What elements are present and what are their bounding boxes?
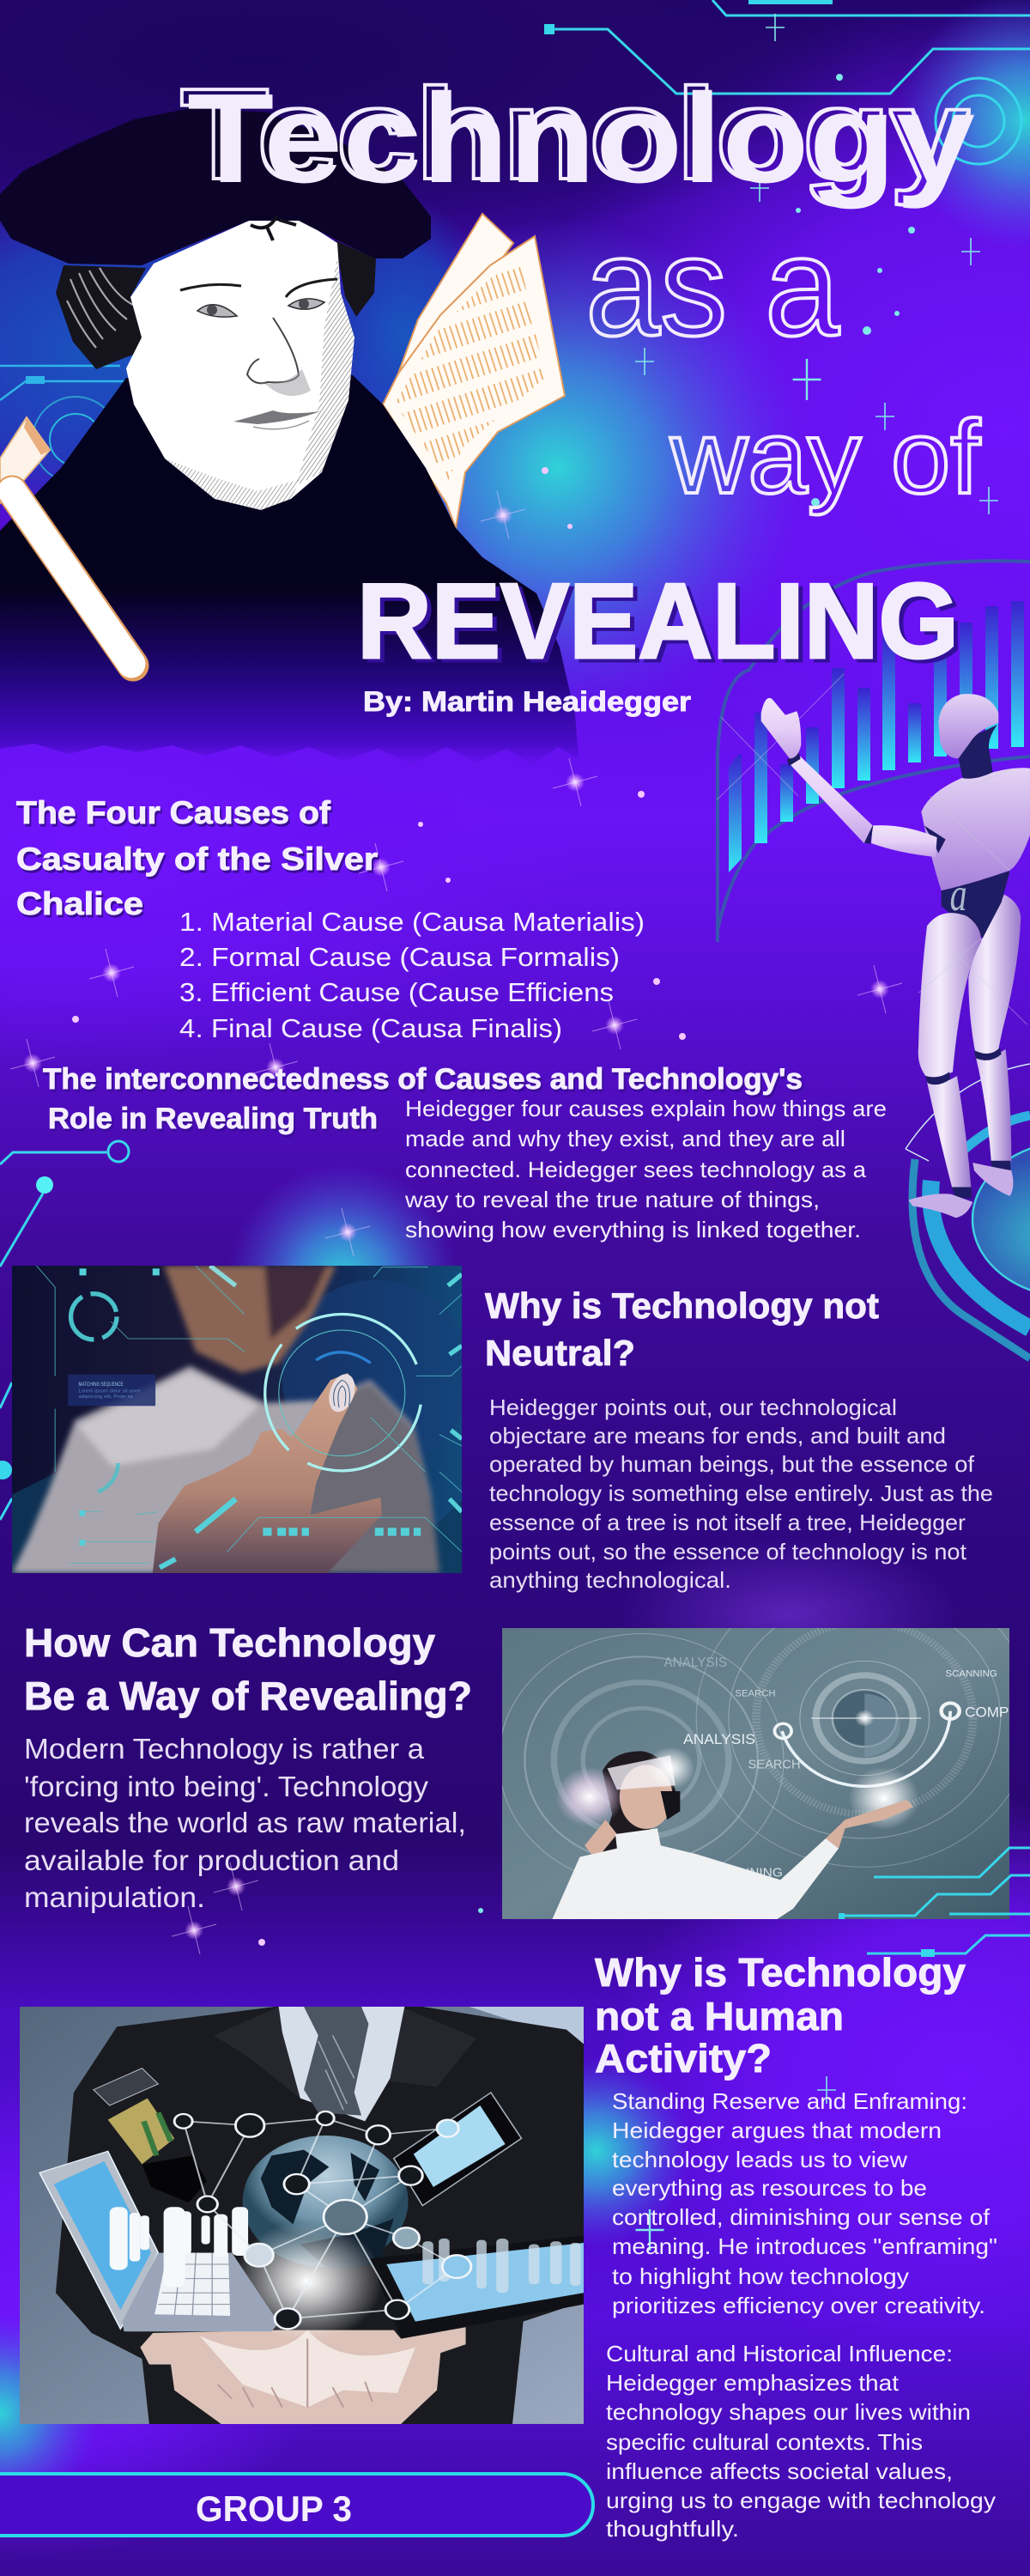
silhouettes on tablet xyxy=(422,2239,581,2293)
glowing arc xyxy=(782,1711,950,1786)
paragraph: standing reserve: technology leads us to view xyxy=(612,2147,907,2172)
heading: not neutral xyxy=(485,1285,879,1373)
watermark letter: a xyxy=(950,869,967,921)
circuit lines upper bottom right xyxy=(867,1935,1030,1957)
paragraph: not neutral: operated by human beings, but the essence of xyxy=(489,1451,975,1477)
tablet xyxy=(371,2236,584,2339)
eyes and brows xyxy=(180,279,337,297)
four causes list: 1. Material Cause (Causa Materialis) xyxy=(179,907,645,937)
hair left xyxy=(56,265,146,369)
portrait: hammer xyxy=(0,417,133,665)
interface labels: SEARCH xyxy=(735,1687,776,1698)
interface labels: NNING xyxy=(740,1866,783,1880)
paragraph: standing reserve: Standing Reserve and Enframing: xyxy=(612,2088,967,2114)
far leg xyxy=(968,895,1021,1056)
photo: hands holding technology xyxy=(20,2007,584,2424)
globe xyxy=(243,2136,409,2267)
gadget box xyxy=(94,2069,158,2105)
paragraph: not neutral xyxy=(489,1394,993,1593)
paragraph: interconnectedness: Heidegger four causes explain how things are xyxy=(405,1096,887,1121)
upper arm xyxy=(871,825,937,857)
silhouettes on laptop xyxy=(110,2207,248,2287)
paragraph: not neutral: Heidegger points out, our technological xyxy=(489,1394,897,1420)
heading: interconnectedness: The interconnectedness of Causes and Technology's xyxy=(43,1063,803,1096)
heading: four causes: Chalice xyxy=(16,886,143,921)
paragraph: interconnectedness: made and why they exist, and they are all xyxy=(405,1126,845,1151)
shoulder joint xyxy=(924,825,946,854)
watermark lines xyxy=(717,674,1027,1024)
heading: four causes: The Four Causes of xyxy=(16,795,331,830)
robot figure xyxy=(717,674,1030,1218)
face xyxy=(126,218,354,510)
heading: human activity: Why is Technology xyxy=(595,1950,966,1995)
heading: human activity: not a Human xyxy=(595,1994,844,2038)
waist xyxy=(942,871,1010,938)
paragraph: cultural influence xyxy=(606,2341,996,2542)
paragraph: standing reserve: Heidegger argues that modern xyxy=(612,2117,942,2143)
circuit lines over woman photo xyxy=(839,1848,1030,1919)
paragraph: standing reserve xyxy=(612,2088,997,2318)
heading: not neutral: Why is Technology not xyxy=(485,1285,879,1326)
heading: interconnectedness xyxy=(43,1063,803,1135)
paragraph: way of revealing: 'forcing into being'. Technology xyxy=(24,1771,429,1802)
shirt xyxy=(279,2007,404,2121)
paragraph: standing reserve: meaning. He introduces "enframing" xyxy=(612,2233,997,2259)
hair right xyxy=(335,240,376,317)
circuit lines mid left xyxy=(0,1141,129,1520)
laptop xyxy=(39,2151,158,2329)
robot platform rings xyxy=(906,1064,1030,1358)
interface label: MATCHING SEQUENCE xyxy=(79,1382,124,1388)
paragraph: cultural influence: technology shapes our lives within xyxy=(606,2399,971,2425)
portrait: papers xyxy=(383,214,565,528)
heading: four causes: Casualty of the Silver xyxy=(16,841,378,877)
paragraph: way of revealing xyxy=(24,1733,466,1913)
portrait: Heidegger illustration xyxy=(0,108,579,764)
paragraph: way of revealing: reveals the world as raw material, xyxy=(24,1807,466,1838)
paragraph: way of revealing: available for production and xyxy=(24,1844,399,1876)
network lines xyxy=(184,2118,457,2318)
paragraph: not neutral: technology is something else entirely. Just as the xyxy=(489,1480,993,1506)
robot backdrop: bars and arcs xyxy=(718,561,1030,942)
heading: not neutral: Neutral? xyxy=(485,1333,635,1373)
hands xyxy=(140,2327,466,2424)
paragraph: way of revealing: Modern Technology is rather a xyxy=(24,1733,425,1765)
paragraph: interconnectedness: connected. Heidegger sees technology as a xyxy=(405,1157,867,1182)
paragraph: not neutral: anything technological. xyxy=(489,1567,731,1593)
title: as a: as a xyxy=(585,207,839,365)
hat xyxy=(0,108,431,265)
interface labels: ANALYSIS xyxy=(664,1656,727,1670)
paragraph: not neutral: objectare are means for ends, and built and xyxy=(489,1423,946,1449)
byline: By: Martin Heaidegger xyxy=(363,686,691,717)
forelock xyxy=(251,216,296,240)
paragraph: cultural influence: Cultural and Historical Influence: xyxy=(606,2341,953,2366)
paragraph: cultural influence: thoughtfully. xyxy=(606,2516,739,2542)
interface labels: ANALYSIS xyxy=(683,1731,755,1747)
title: way of: way of xyxy=(670,398,981,515)
paragraph: interconnectedness: way to reveal the true nature of things, xyxy=(404,1187,820,1212)
four causes list: 3. Efficient Cause (Cause Efficiens xyxy=(179,977,614,1007)
heading: way of revealing: Be a Way of Revealing? xyxy=(24,1674,472,1718)
four causes list: 2. Formal Cause (Causa Formalis) xyxy=(179,942,620,972)
paragraph: way of revealing: manipulation. xyxy=(24,1881,205,1913)
photo: woman with holographic visor xyxy=(502,1628,1009,1919)
phone xyxy=(394,2093,522,2206)
interface labels: SEARCH xyxy=(748,1758,801,1771)
coat xyxy=(0,375,579,764)
interface labels xyxy=(664,1656,1009,1880)
circuit lines top right xyxy=(544,0,1030,164)
interface labels: SCANNING xyxy=(945,1668,997,1679)
hand xyxy=(761,698,801,758)
interface label xyxy=(79,1382,141,1400)
forearm xyxy=(788,756,873,843)
paragraph: interconnectedness xyxy=(404,1096,887,1242)
mouth xyxy=(233,410,320,424)
interface labels: COMP xyxy=(965,1704,1009,1720)
heading: interconnectedness: Role in Revealing Truth xyxy=(48,1103,378,1135)
paragraph: standing reserve: prioritizes efficiency over creativity. xyxy=(612,2293,985,2318)
circuit lines left of portrait xyxy=(0,366,124,483)
paragraph: not neutral: points out, so the essence of technology is not xyxy=(489,1539,967,1564)
heading: human activity: Activity? xyxy=(595,2036,772,2081)
hologram rings xyxy=(36,1266,462,1568)
hud rings xyxy=(502,1628,1009,1879)
four causes list xyxy=(179,907,645,1043)
torso xyxy=(921,768,1030,890)
hair strands xyxy=(67,268,133,348)
title: REVEALING: REVEALING xyxy=(357,562,959,681)
paragraph: cultural influence: influence affects societal values, xyxy=(606,2458,953,2484)
four causes list: 4. Final Cause (Causa Finalis) xyxy=(179,1013,562,1043)
interface label: Lorem ipsum dolor sit amet xyxy=(79,1388,141,1394)
woman xyxy=(552,1747,913,1919)
paragraph: cultural influence: Heidegger emphasizes that xyxy=(606,2370,900,2396)
helmet xyxy=(938,694,998,758)
interface label: adipiscing elit, Proin se xyxy=(79,1394,133,1400)
nose xyxy=(247,318,299,383)
heading: way of revealing xyxy=(24,1620,472,1718)
suit xyxy=(56,2007,584,2424)
paragraph: not neutral: essence of a tree is not itself a tree, Heidegger xyxy=(489,1510,966,1535)
paragraph: standing reserve: to highlight how technology xyxy=(612,2263,909,2289)
neck xyxy=(959,725,997,779)
blurred person xyxy=(12,1266,439,1573)
photo: fingerprint hologram xyxy=(12,1266,471,1573)
network nodes xyxy=(174,2111,471,2329)
title: Technology: Technology xyxy=(187,68,975,210)
pointing hand xyxy=(153,1373,382,1573)
paragraph: cultural influence: specific cultural contexts. This xyxy=(606,2429,923,2455)
paragraph: standing reserve: everything as resources to be xyxy=(612,2175,927,2201)
footer: group label pill xyxy=(0,2474,593,2536)
paragraph: standing reserve: controlled, diminishing our sense of xyxy=(612,2204,991,2230)
paragraph: cultural influence: urging us to engage with technology xyxy=(606,2488,996,2513)
heading: four causes xyxy=(16,795,378,921)
group label: GROUP 3 xyxy=(196,2488,352,2529)
paragraph: interconnectedness: showing how everything is linked together. xyxy=(405,1217,861,1242)
cheek hatching xyxy=(296,258,354,485)
heading: way of revealing: How Can Technology xyxy=(24,1620,435,1665)
near leg xyxy=(918,913,981,1078)
heading: human activity xyxy=(595,1950,966,2081)
